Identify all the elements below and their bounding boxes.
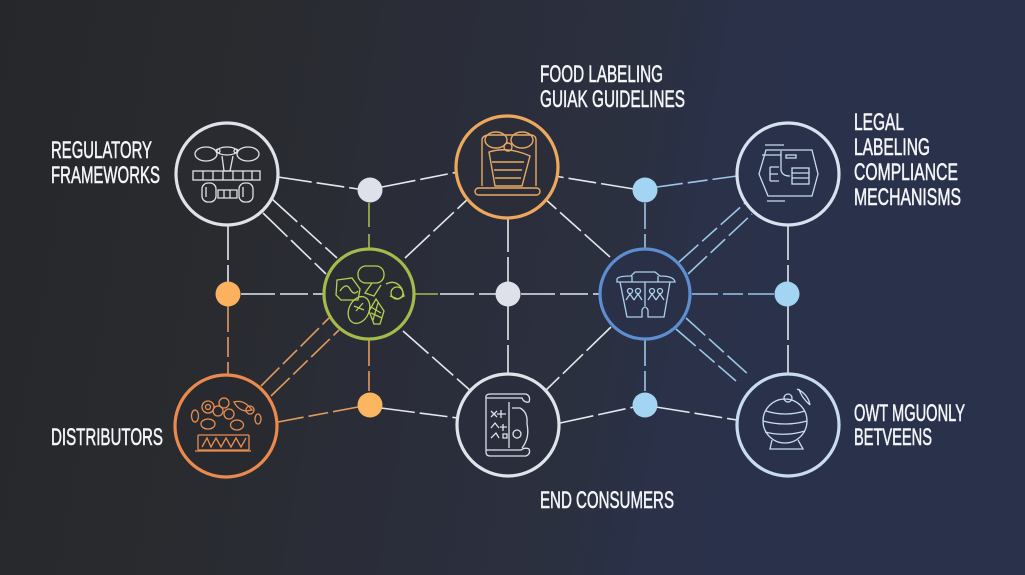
icon: cups with figures xyxy=(617,272,675,317)
label: regulatory frameworks: FRAMEWORKS xyxy=(51,162,160,189)
label: regulatory frameworks: REGULATORY xyxy=(51,137,152,164)
label: end consumers: END CONSUMERS xyxy=(540,487,674,514)
icon: compliance document box xyxy=(759,145,818,201)
label: owt mguonly betveens: BETVEENS xyxy=(854,424,932,451)
label: legal labeling compliance mechanisms: COMPLIANCE xyxy=(854,159,958,186)
node: regulatory frameworks xyxy=(176,123,278,225)
label: food labeling guidelines: GUIAK GUIDELINES xyxy=(540,86,685,113)
label: legal labeling compliance mechanisms: LABELING xyxy=(854,134,930,161)
connector lines xyxy=(228,172,788,423)
node: food labeling guidelines xyxy=(456,116,558,218)
icon: produce crate xyxy=(192,398,261,451)
icon: assorted produce xyxy=(336,266,404,327)
node: owt mguonly betveens xyxy=(737,374,839,476)
icon: round barrel xyxy=(763,389,810,449)
connector dots xyxy=(216,178,800,418)
label: legal labeling compliance mechanisms: LEGAL xyxy=(854,109,904,136)
node: green food hub xyxy=(324,249,414,339)
icon: scroll with marks xyxy=(486,394,530,456)
node: legal labeling compliance mechanisms xyxy=(737,123,839,225)
icon: labeled food stand xyxy=(475,132,540,195)
label: food labeling guidelines: FOOD LABELING xyxy=(540,61,663,88)
label: owt mguonly betveens xyxy=(854,400,965,451)
label: distributors: DISTRIBUTORS xyxy=(51,424,163,451)
label: legal labeling compliance mechanisms: MECHANISMS xyxy=(854,184,961,211)
label: legal labeling compliance mechanisms xyxy=(854,109,961,211)
label: regulatory frameworks xyxy=(51,137,160,189)
icon: regulatory building xyxy=(193,147,260,202)
node: distributors xyxy=(175,375,277,477)
node: end consumers xyxy=(457,374,559,476)
label: food labeling guidelines xyxy=(540,61,685,113)
node: blue packaging hub xyxy=(600,249,690,339)
